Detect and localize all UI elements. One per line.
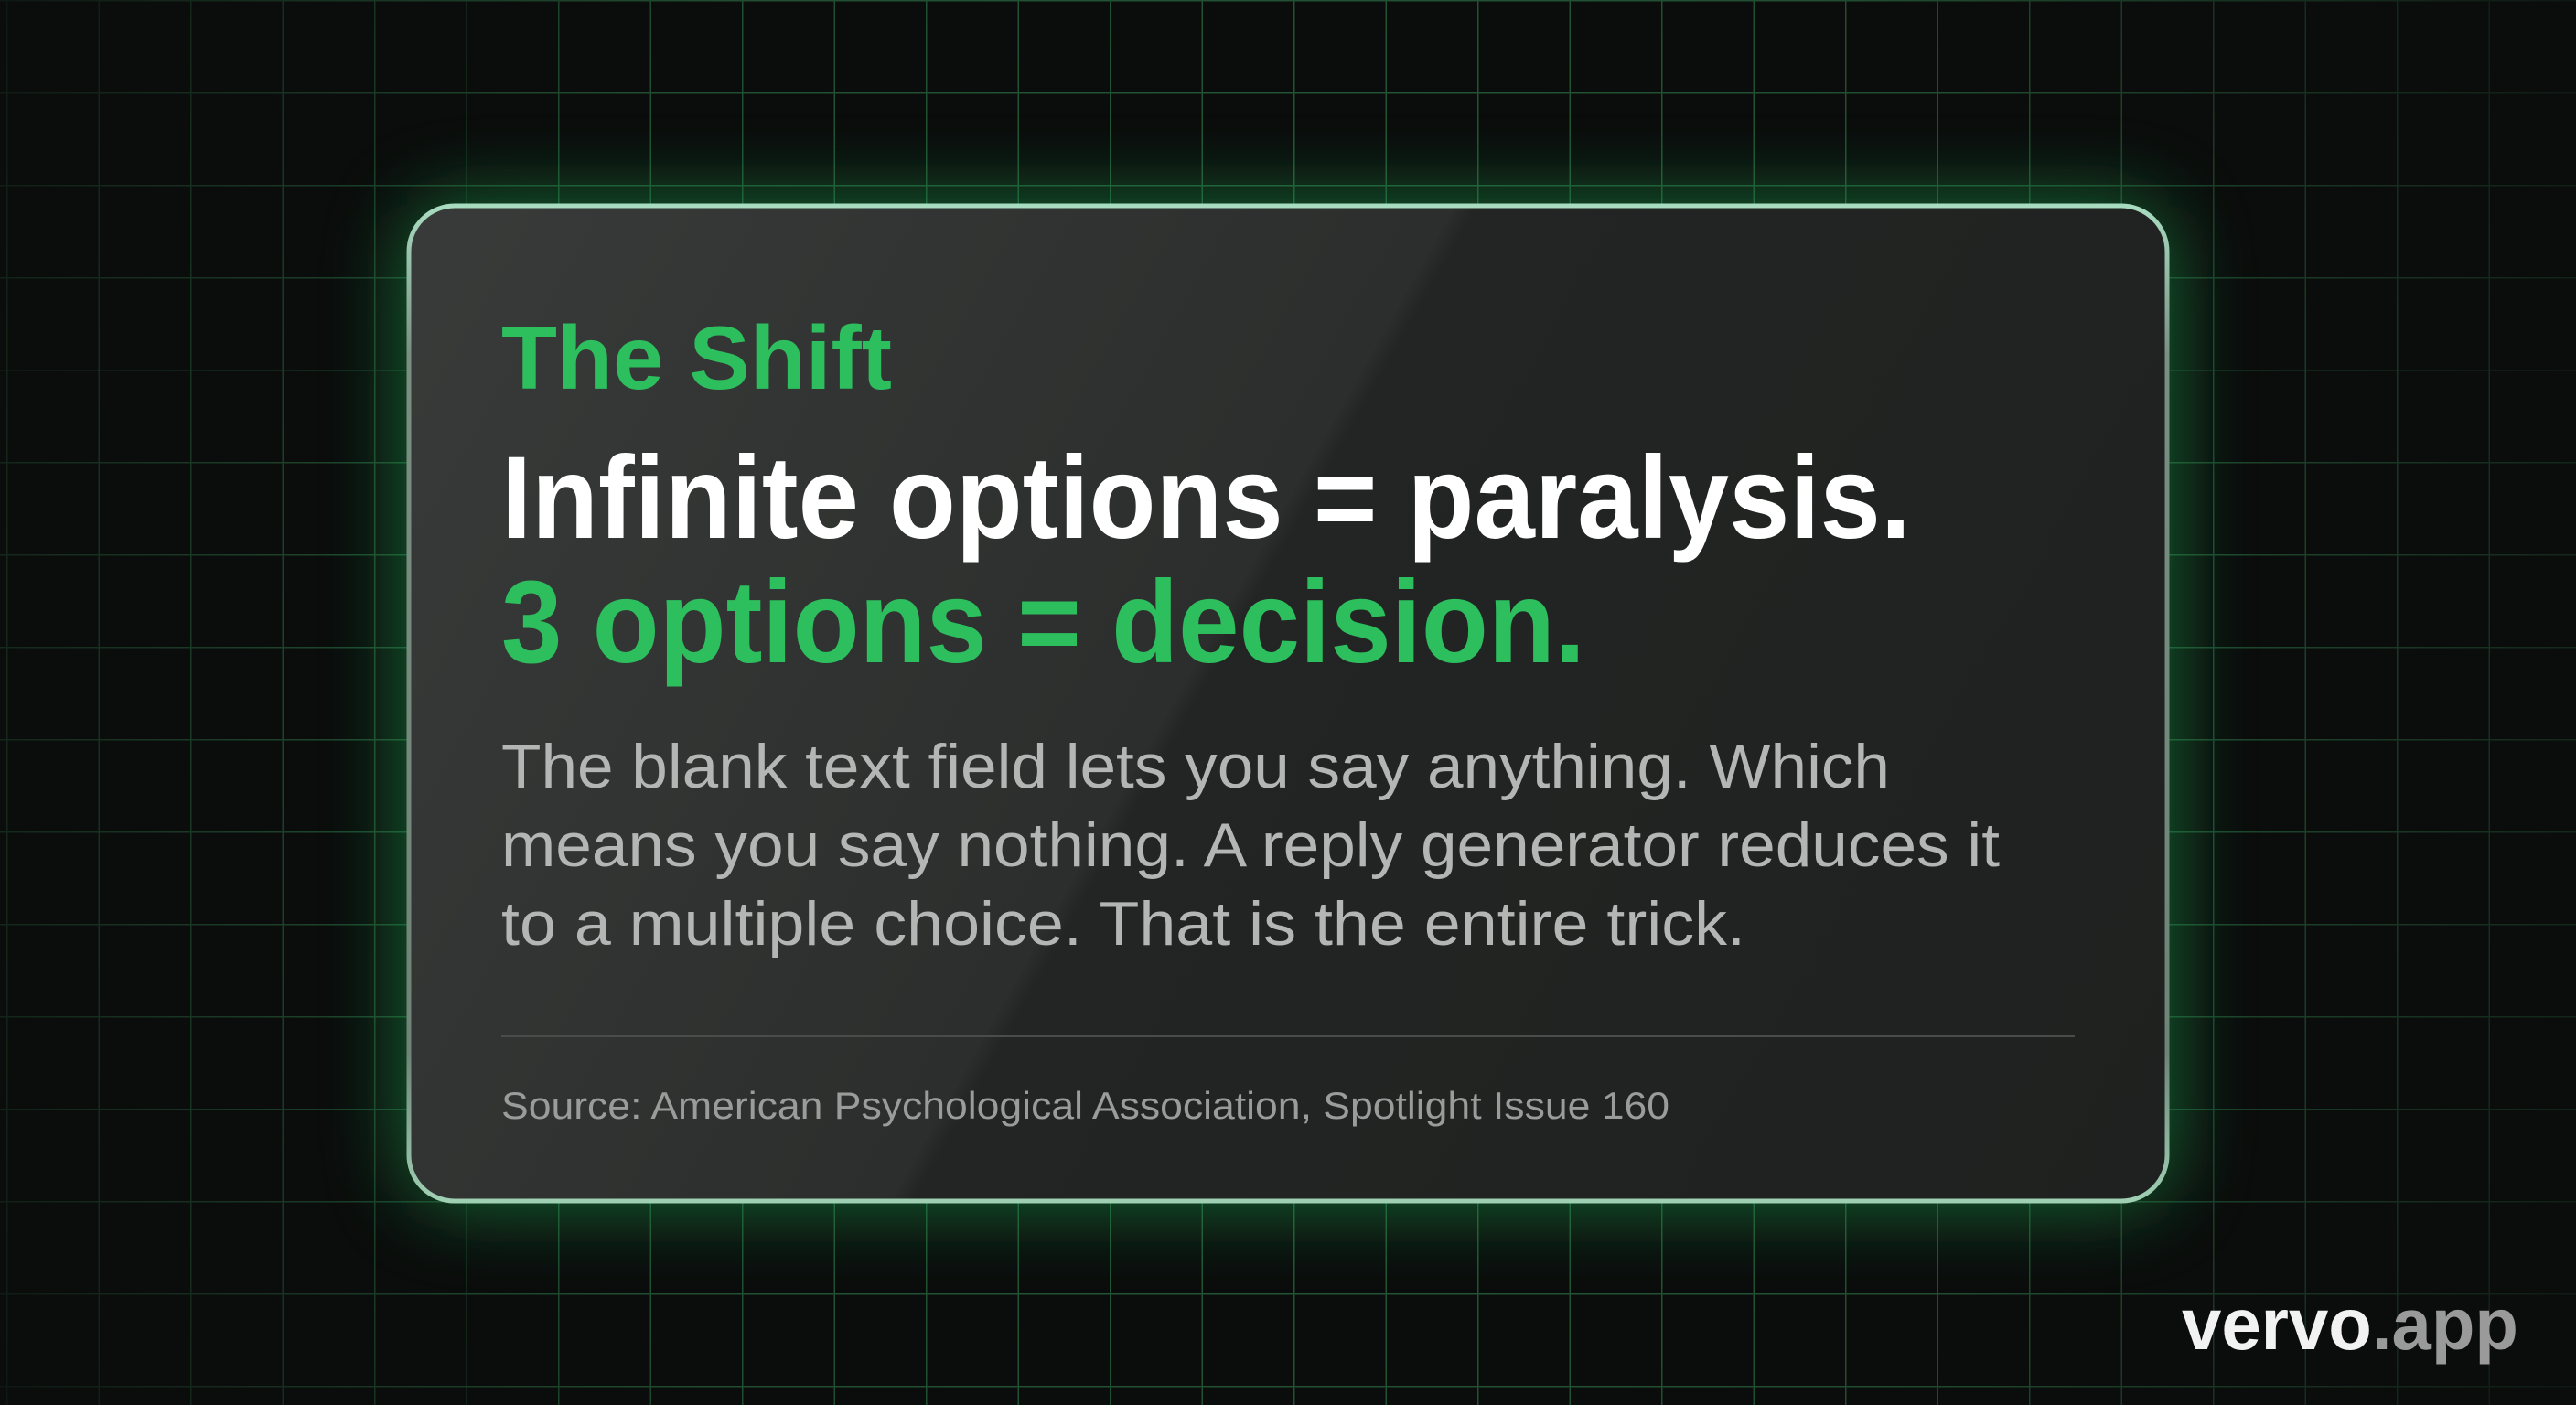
- heading: The Shift: The Shift: [501, 307, 892, 408]
- body text: The blank text field lets you say anything. Which: [501, 732, 1890, 801]
- logo: vervo.app: vervo.app: [2182, 1283, 2518, 1365]
- headline line 2: 3 options = decision.: [501, 557, 1585, 688]
- source text: Source: American Psychological Association, Spotlight Issue 160: [501, 1084, 1669, 1127]
- body text: to a multiple choice. That is the entire trick.: [501, 889, 1745, 959]
- body text: means you say nothing. A reply generator reduces it: [501, 810, 2000, 880]
- body text: [501, 732, 2000, 959]
- headline line 1: Infinite options = paralysis.: [501, 433, 1911, 563]
- panel: card: [409, 206, 2167, 1201]
- card glow: [407, 204, 2169, 1203]
